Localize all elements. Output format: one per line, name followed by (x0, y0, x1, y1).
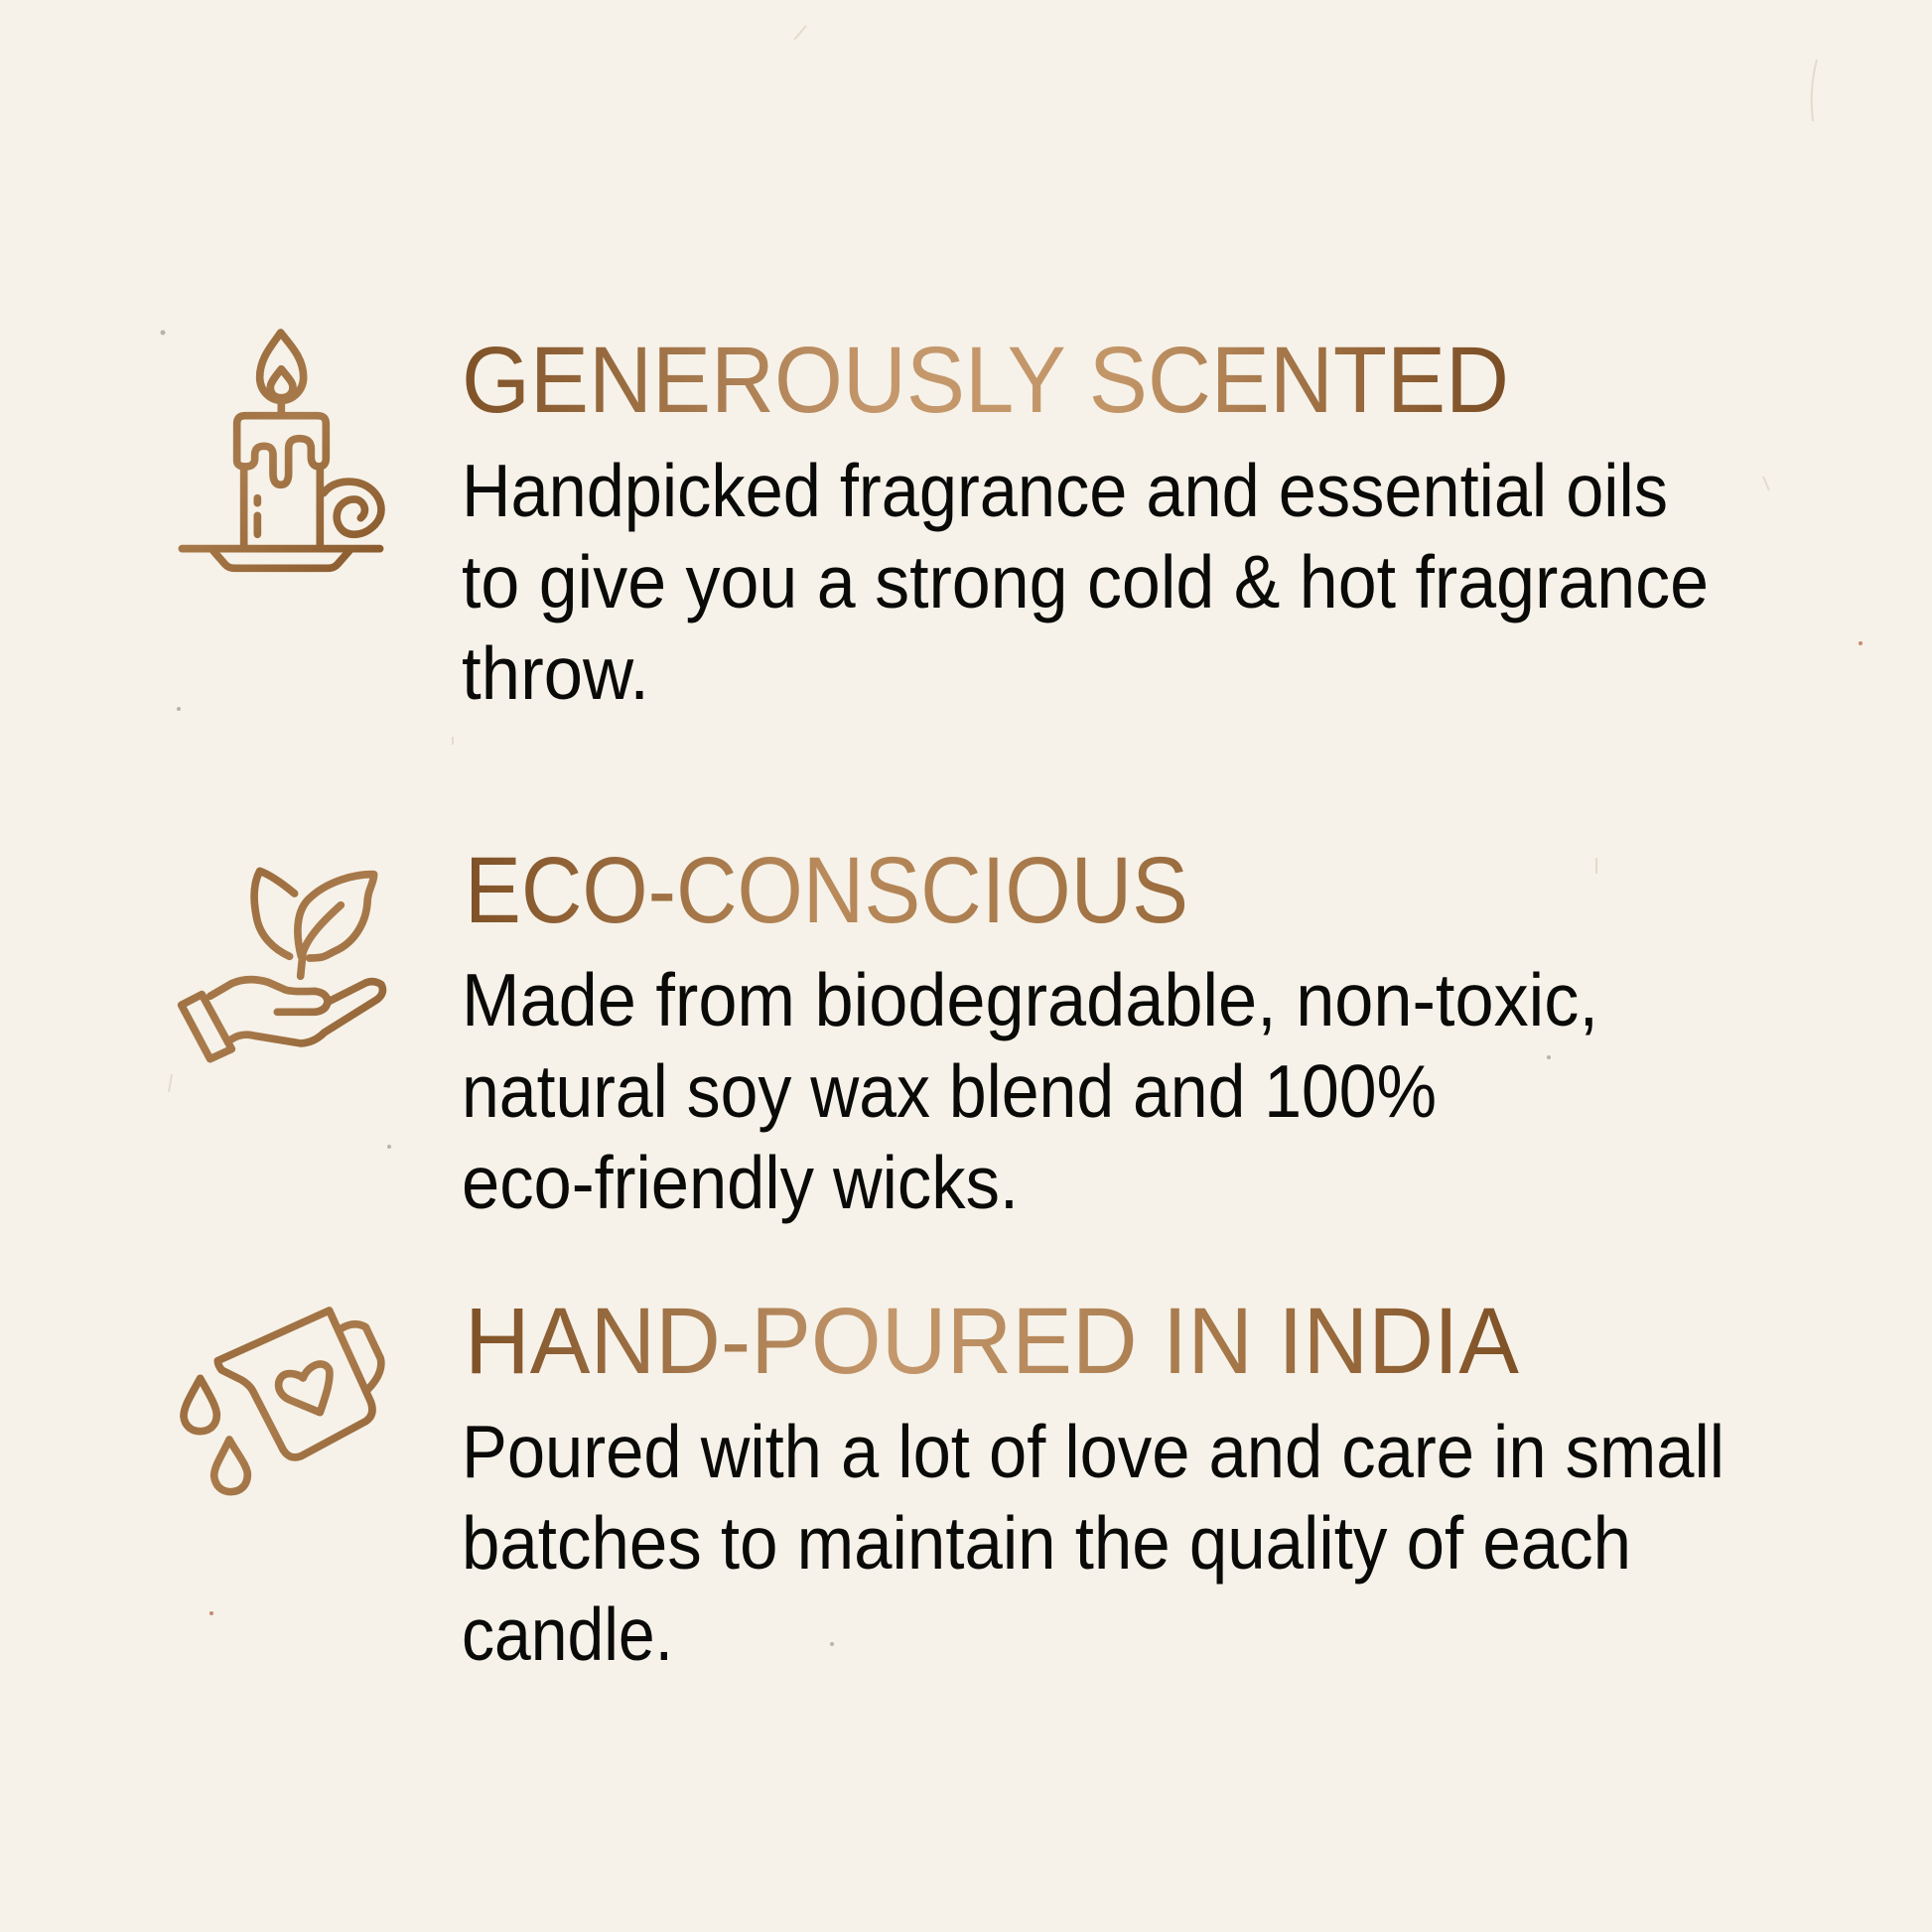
heading: hand-poured in india: HAND-POURED IN INDIA (465, 1289, 1520, 1394)
icon: pouring jug with heart (184, 1311, 381, 1492)
text block: scent description: Handpicked fragrance and essential oils (462, 449, 1668, 532)
text block: eco description (462, 958, 1598, 1224)
text block: eco description: eco-friendly wicks. (462, 1141, 1019, 1224)
text block: scent description: to give you a strong cold & hot fragrance (462, 540, 1709, 623)
text block: eco description: natural soy wax blend and 100% (462, 1049, 1437, 1133)
text block: pouring description: candle. (462, 1592, 673, 1676)
icon: candle (182, 333, 381, 568)
text block: pouring description (462, 1410, 1725, 1676)
text block: pouring description: batches to maintain the quality of each (462, 1501, 1631, 1585)
panel: eco-conscious (182, 838, 1598, 1224)
text block: scent description: throw. (462, 631, 649, 715)
icon: hand holding leaves (182, 871, 382, 1059)
panel: hand-poured in india (184, 1289, 1725, 1676)
text block: scent description (462, 449, 1709, 715)
panel: generously scented (182, 328, 1709, 715)
heading: generously scented: GENEROUSLY SCENTED (462, 328, 1509, 433)
text block: eco description: Made from biodegradable, non-toxic, (462, 958, 1598, 1041)
heading: eco-conscious: ECO-CONSCIOUS (465, 838, 1188, 943)
text block: pouring description: Poured with a lot of love and care in small (462, 1410, 1725, 1493)
